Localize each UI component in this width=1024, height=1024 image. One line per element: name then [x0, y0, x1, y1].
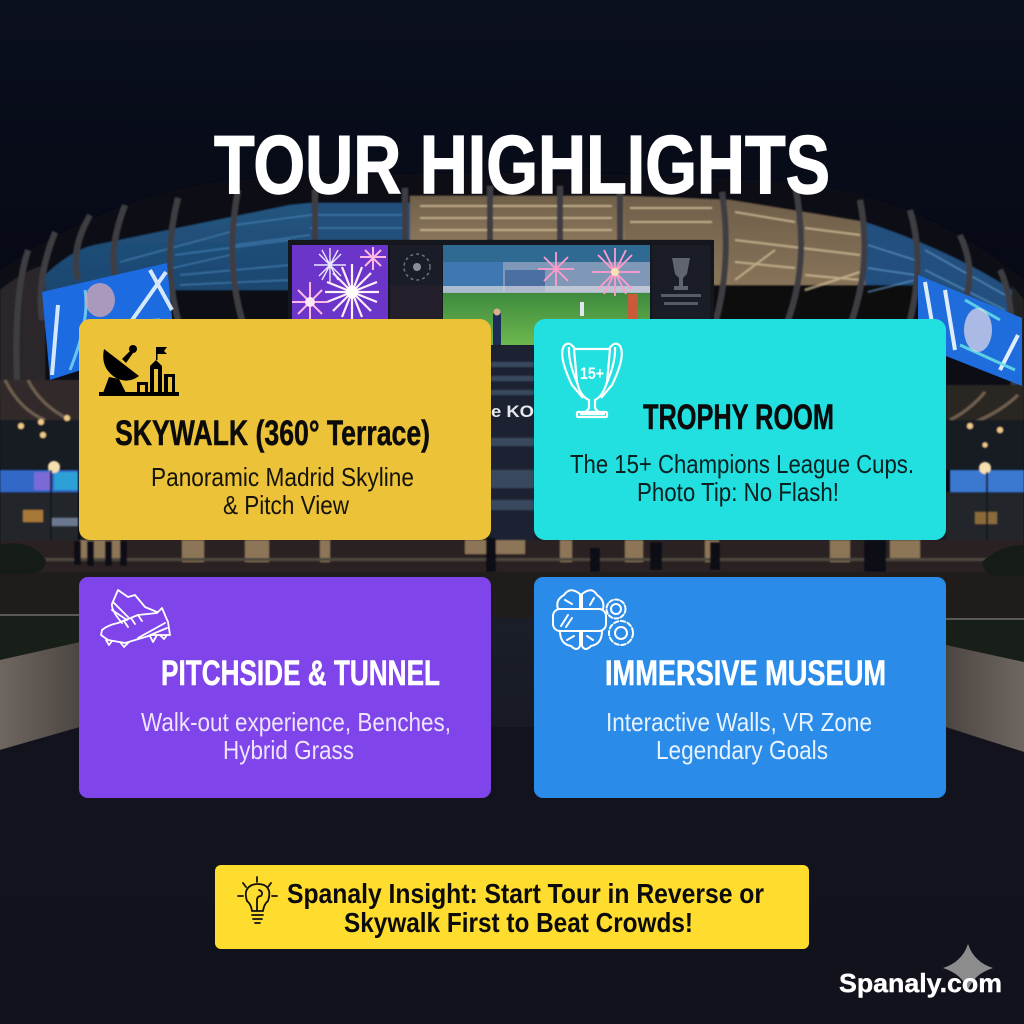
trophy label: 15+	[580, 364, 604, 383]
central video wall	[288, 240, 714, 345]
heading: immersive museum: IMMERSIVE MUSEUM	[605, 654, 886, 693]
icon: light bulb	[238, 877, 277, 923]
description: immersive museum: Interactive Walls, VR Zone	[606, 707, 872, 737]
icon: brain with VR goggles and gears	[553, 590, 633, 649]
title: TOUR HIGHLIGHTS	[214, 118, 830, 211]
panel: immersive museum	[534, 577, 946, 798]
dark trophy panel right	[652, 245, 710, 320]
description: trophy room: The 15+ Champions League Cups.	[570, 449, 914, 479]
heading: skywalk: SKYWALK (360° Terrace)	[115, 414, 430, 453]
forecourt ground	[0, 543, 1024, 1024]
icon: satellite dish and skyline	[99, 345, 179, 396]
stadium pitch panel	[443, 245, 650, 345]
stadium lower facade	[0, 345, 1024, 545]
description: immersive museum	[606, 707, 872, 765]
callout text: Skywalk First to Beat Crowds!	[344, 907, 693, 938]
description: pitchside	[141, 707, 451, 765]
description: trophy room: Photo Tip: No Flash!	[637, 477, 839, 507]
callout text	[287, 878, 764, 938]
stadium upper roof band	[0, 173, 1024, 420]
facade lit sign: e KO	[491, 402, 534, 421]
description: trophy room	[570, 449, 914, 507]
description: pitchside: Walk-out experience, Benches,	[141, 707, 451, 737]
fireworks panel	[292, 245, 388, 320]
callout: spanaly insight	[215, 865, 809, 949]
roof ribs	[16, 185, 1014, 400]
description: skywalk: Panoramic Madrid Skyline	[151, 462, 414, 492]
heading: pitchside: PITCHSIDE & TUNNEL	[161, 654, 440, 693]
dark logo panel left	[390, 245, 442, 320]
description: skywalk: & Pitch View	[223, 490, 349, 520]
heading: trophy room: TROPHY ROOM	[643, 398, 834, 437]
panel: pitchside and tunnel	[79, 577, 491, 798]
left side screen	[42, 263, 174, 380]
panel: trophy room	[534, 319, 946, 540]
panel: skywalk	[79, 319, 491, 540]
icon: trophy 15+	[562, 344, 622, 417]
logo star	[943, 944, 993, 990]
icon: football boots	[101, 590, 170, 647]
description: pitchside: Hybrid Grass	[223, 735, 354, 765]
seat stripes	[120, 215, 405, 285]
logo text: Spanaly.com	[839, 968, 1002, 998]
plaza at stadium base	[0, 461, 1024, 575]
logo: spanaly.com	[839, 944, 1002, 998]
description: skywalk	[151, 462, 414, 520]
description: immersive museum: Legendary Goals	[656, 735, 828, 765]
callout text: Spanaly Insight: Start Tour in Reverse or	[287, 878, 764, 909]
right side screen	[918, 275, 1022, 386]
